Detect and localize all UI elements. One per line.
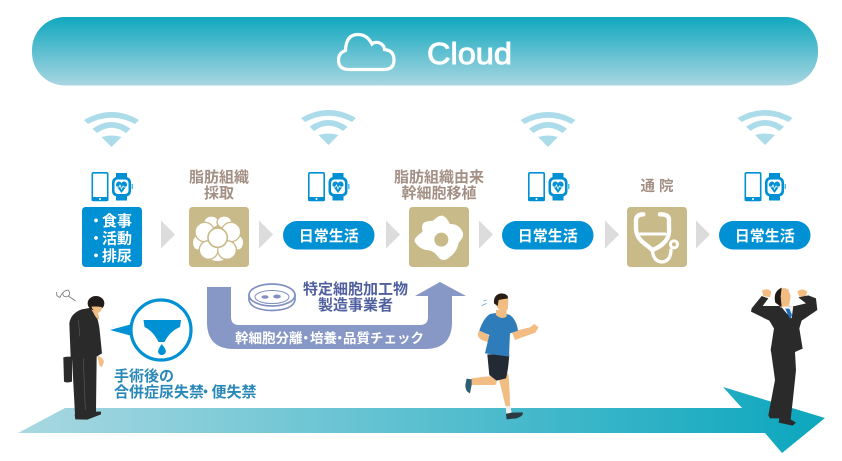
step: adipose tissue harvest: 脂肪組織: [189, 169, 249, 186]
wifi icons: [84, 110, 792, 147]
cloud label: Cloud: [427, 36, 512, 71]
rear leg: [467, 376, 497, 385]
step: meal, activity, urination: 活動: [102, 230, 132, 248]
process label: 品質チェック: [343, 330, 424, 346]
step: meal, activity, urination: 食事: [102, 212, 132, 230]
speech bubble: incontinence: [110, 300, 191, 360]
icon: underwear and drop: [144, 320, 181, 342]
step: daily life pill: 日常生活: [735, 228, 795, 245]
sigh scribble: [57, 290, 76, 301]
cell processing company label: 特定細胞加工物: [303, 280, 408, 298]
step: hospital visit: [627, 178, 687, 267]
complication label: 便失禁: [212, 383, 257, 401]
complication label: [114, 367, 257, 401]
icon: adipose tissue: [192, 216, 244, 262]
smartphone and smartwatch icons: [92, 173, 786, 201]
suit: [751, 295, 817, 426]
process label: ・: [333, 331, 346, 346]
shirt: [479, 313, 518, 357]
step: stem cell transplant: [394, 169, 484, 267]
step: meal, activity, urination: 排尿: [102, 247, 132, 265]
process label: ・: [299, 331, 312, 346]
step: stem cell transplant: 脂肪組織由来: [394, 169, 484, 186]
cell processing U-shaped arrow: [207, 282, 466, 349]
process label: 幹細胞分離: [235, 330, 303, 346]
figure: dejected man: [57, 290, 104, 420]
cell processing company label: [303, 280, 408, 314]
shirt and tie: [781, 306, 793, 318]
head: [496, 309, 507, 318]
step: meal, activity, urination: ・: [88, 213, 104, 230]
arms: [512, 324, 539, 340]
fists: [762, 289, 771, 297]
step arrows: [161, 220, 710, 248]
step: adipose tissue harvest: [189, 169, 249, 267]
complication label: 合併症尿失禁: [114, 383, 204, 401]
step: stem cell transplant: 幹細胞移植: [401, 184, 477, 202]
step: daily life pill: [502, 221, 594, 250]
step: hospital visit: 通 院: [640, 178, 674, 195]
figure: runner: [465, 293, 539, 419]
ground arrow: [18, 387, 825, 453]
front leg: [498, 373, 510, 407]
cloud banner: [32, 17, 818, 86]
step: daily life pill: 日常生活: [518, 228, 578, 245]
shorts: [487, 354, 509, 381]
complication label: 手術後の: [114, 367, 174, 385]
icon: cloud: [338, 34, 394, 70]
step: daily life pill: [719, 221, 810, 250]
step: daily life pill: [283, 221, 374, 250]
step: meal, activity, urination: [82, 207, 142, 267]
process label: 培養: [310, 330, 337, 346]
cell processing company label: 製造事業者: [318, 296, 393, 314]
icon: petri dish: [249, 284, 295, 310]
icon: stem cell: [414, 216, 463, 260]
step: adipose tissue harvest: 採取: [204, 185, 234, 202]
figure: triumphant man: [751, 288, 817, 426]
complication label: ・: [198, 384, 213, 401]
step: meal, activity, urination: ・: [88, 248, 104, 265]
sweat marks: [482, 300, 487, 306]
icon: stethoscope: [636, 214, 679, 262]
step: daily life pill: 日常生活: [299, 228, 359, 245]
head: [780, 288, 791, 308]
step: meal, activity, urination: ・: [88, 230, 104, 248]
